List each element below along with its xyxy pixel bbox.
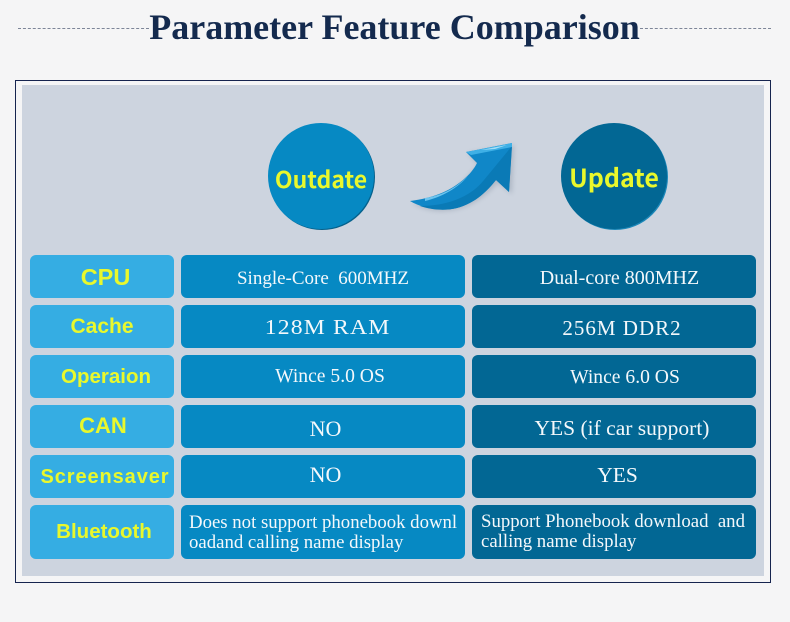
updated Screensaver value [472, 455, 756, 498]
outdated Cache value [181, 305, 465, 348]
updated Operation value [472, 355, 756, 398]
updated CPU value [472, 255, 756, 298]
label: Bluetooth: Bluetooth [56, 520, 152, 543]
outdated CAN value: NO [310, 416, 341, 440]
panel background [22, 85, 764, 576]
outdated Screensaver value [181, 455, 465, 498]
updated Bluetooth value [472, 505, 756, 559]
label: Operaion: Operaion [61, 364, 151, 388]
updated CPU value: Dual-core 800MHZ [540, 266, 699, 288]
updated Bluetooth value: Support Phonebook download and [481, 511, 745, 532]
outdated CPU value: Single-Core 600MHZ [237, 268, 409, 289]
label: CAN [30, 405, 174, 448]
outdated Bluetooth value [181, 505, 465, 559]
outdated Bluetooth value: oadand calling name display [189, 532, 403, 553]
outdated Screensaver value: NO [310, 462, 341, 487]
outdated CAN value [181, 405, 465, 448]
label: Bluetooth [30, 505, 174, 559]
circle: Outdate [268, 123, 374, 229]
updated Bluetooth value: calling name display [481, 531, 636, 552]
label: CAN: CAN [79, 413, 127, 438]
label: Cache [30, 305, 174, 348]
icon: upgrade arrow [410, 143, 515, 212]
updated Cache value [472, 305, 756, 348]
updated Operation value: Wince 6.0 OS [570, 366, 680, 388]
label: CPU [30, 255, 174, 298]
circle: Update: Update [569, 158, 659, 194]
updated CAN value: YES (if car support) [535, 416, 709, 440]
outdated Bluetooth value: Does not support phonebook downl [189, 512, 457, 533]
label: Operaion [30, 355, 174, 398]
outdated Operation value: Wince 5.0 OS [275, 366, 385, 386]
updated Screensaver value: YES [597, 462, 638, 486]
label: Cache: Cache [70, 315, 134, 338]
label: Screensaver [30, 455, 174, 498]
outdated Cache value: 128M RAM [265, 315, 390, 339]
heading: Parameter Feature Comparison [149, 7, 640, 47]
label: Screensaver: Screensaver [41, 466, 169, 488]
updated CAN value [472, 405, 756, 448]
updated Cache value: 256M DDR2 [562, 316, 682, 340]
circle: Outdate: Outdate [275, 160, 367, 194]
outdated Operation value [181, 355, 465, 398]
circle: Update [561, 123, 667, 229]
panel: comparison table frame [15, 80, 771, 583]
outdated CPU value [181, 255, 465, 298]
label: CPU: CPU [81, 264, 130, 290]
